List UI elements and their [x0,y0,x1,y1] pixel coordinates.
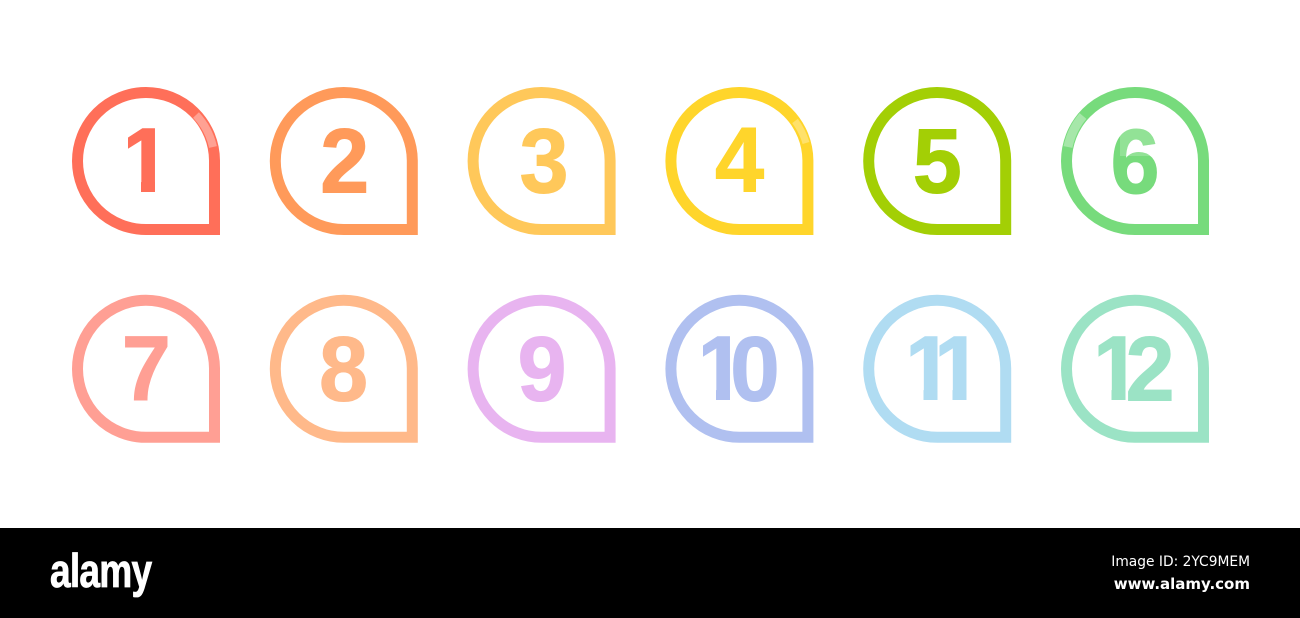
badge 9: 9 [517,318,567,421]
badge 7 [78,300,214,437]
badge 10: 0 [730,318,780,421]
badge 3 [473,92,610,230]
badge 8: 8 [319,318,368,421]
badge 4 [671,92,808,230]
badge 1 [78,92,214,230]
badge 10 [671,300,808,437]
badge 9 [473,300,610,437]
badge 12: 1 [1091,318,1142,420]
badge 6 [1067,92,1204,230]
badge 2 [275,92,412,230]
badge 3: 3 [519,110,569,213]
badge 10: 1 [695,318,747,420]
badge 4: 4 [715,109,764,212]
badge 12: 2 [1125,318,1175,421]
badge 7: 7 [122,317,171,420]
badge 11: 1 [932,318,983,420]
alamy logo: alamy [50,545,152,597]
image id: Image ID: 2YC9MEM [1111,554,1250,570]
badge 5: 5 [913,110,962,213]
footer bar [0,528,1300,618]
badge 2: 2 [320,110,369,213]
website: www.alamy.com [1114,575,1250,593]
badge 5 [869,92,1006,230]
badge 12 [1067,300,1204,437]
badge 8 [275,300,412,437]
badge 6: 6 [1110,110,1160,213]
badge 11 [869,300,1006,437]
badge 11: 1 [903,318,954,420]
badge 1: 1 [120,110,172,212]
